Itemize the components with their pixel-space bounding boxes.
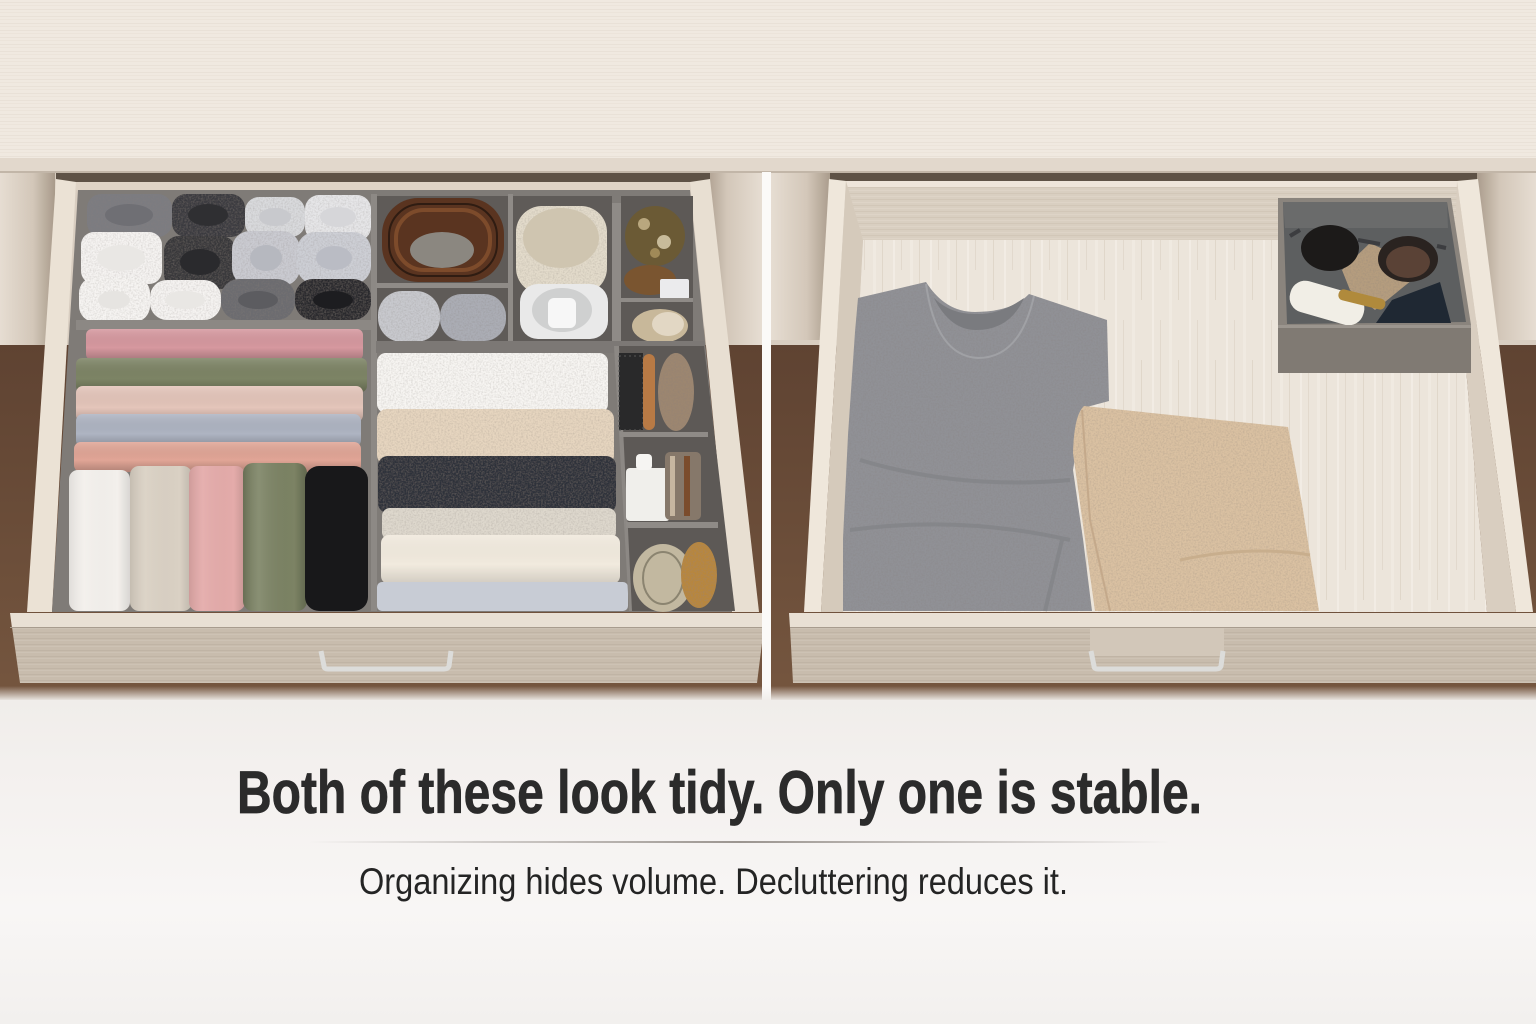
lower caption background <box>0 686 1536 1024</box>
felt organizer base <box>52 190 732 612</box>
sunglasses <box>1290 225 1446 282</box>
subheadline: Organizing hides volume. Decluttering reduces it. <box>359 861 1068 902</box>
drawer back wall <box>846 181 1458 240</box>
small sock compartment <box>376 283 509 342</box>
drawer shadow opening <box>830 173 1477 182</box>
drawer walls <box>27 179 759 612</box>
panel: decluttered drawer <box>789 173 1536 683</box>
box front <box>1278 325 1471 373</box>
grey t-shirt <box>843 282 1109 611</box>
folded shirts stack <box>74 329 367 472</box>
white roller <box>1286 277 1368 329</box>
gold lipstick <box>1337 288 1386 311</box>
cabinet top surface <box>0 0 1536 173</box>
drawer front <box>789 613 1536 683</box>
rolled socks grid <box>79 194 371 322</box>
comb and brush <box>619 353 694 431</box>
drawer handle <box>321 651 451 669</box>
beige towel <box>1073 406 1319 611</box>
folded towels stack <box>377 353 628 611</box>
beige cloth <box>1342 243 1412 310</box>
center divider <box>762 172 771 700</box>
jewelry compartment <box>612 196 693 343</box>
cabinet background <box>0 0 1536 700</box>
drawer handle <box>1091 651 1223 669</box>
small compartments column <box>614 346 735 612</box>
divider rule <box>309 841 1170 843</box>
headline: Both of these look tidy. Only one is stable. <box>237 759 1202 826</box>
basket and silver case compartment <box>508 194 612 341</box>
spool and round brush <box>633 542 717 612</box>
vertically folded shirts <box>69 463 368 611</box>
drawer side walls <box>804 179 1533 612</box>
drawer floor <box>843 240 1487 612</box>
panel: organized drawer <box>10 173 765 683</box>
drawer front <box>10 613 765 683</box>
felt divider center <box>371 194 377 611</box>
navy pouch <box>1376 282 1451 323</box>
towel section lip <box>376 341 706 353</box>
divider under socks <box>76 320 372 330</box>
drawer shadow opening <box>56 173 710 182</box>
small organizer box <box>1278 198 1471 373</box>
bottle and clips <box>626 452 701 521</box>
belt compartment <box>377 196 508 283</box>
